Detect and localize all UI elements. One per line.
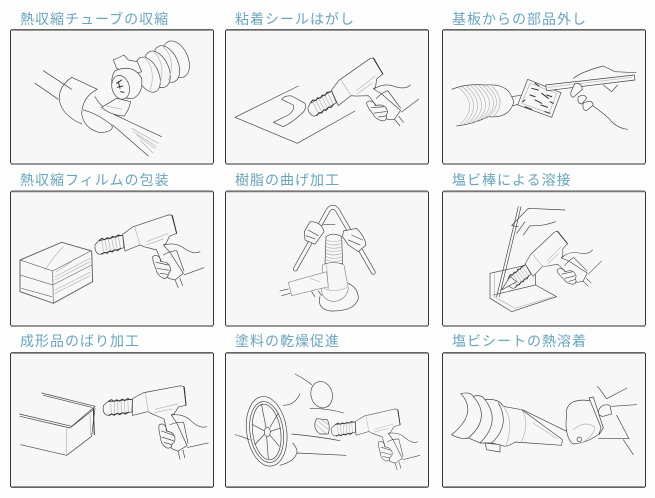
illustration: tube and connector [35,37,195,156]
panel: resin bending [226,172,428,326]
panel frame [226,191,428,326]
illustration: car with heat gun [235,374,424,472]
heading: component removal: 基板からの部品外し [452,11,587,27]
panel frame [226,30,428,164]
panel frame [10,191,214,326]
illustration: peeling sticker with heat gun [235,49,424,149]
panel: PVC sheet welding [442,333,646,488]
heading: paint drying: 塗料の乾燥促進 [235,333,340,349]
illustration: nozzle and pressure roller [452,386,637,455]
panel: deburring molded parts [10,333,216,488]
heading: PVC rod welding: 塩ビ棒による溶接 [452,172,572,188]
illustration: wrapped boxes with heat gun [20,215,204,303]
heading: shrink film packaging: 熱収縮フィルムの包装 [20,172,169,188]
illustration: welding with PVC rod [490,207,609,316]
heading: deburring: 成形品のばり加工 [20,333,140,349]
panel: paint drying [226,333,428,488]
panel frame [442,191,646,326]
panel frame [10,30,214,164]
panel frame [442,30,646,164]
heading: PVC sheet welding: 塩ビシートの熱溶着 [452,333,587,349]
illustration: molded box with heat gun [19,376,216,463]
heading: sticker peeling: 粘着シールはがし [235,11,355,27]
illustration: bending a resin rod over a heat gun [280,207,373,311]
panel frame [10,352,214,488]
panel: sticker peeling [226,11,428,164]
panel: heat-shrink tube [10,11,214,164]
panel: board component removal [442,11,646,164]
heading: resin bending: 樹脂の曲げ加工 [235,172,340,188]
panel frame [442,352,646,488]
heading: heat-shrink tube: 熱収縮チューブの収縮 [20,11,169,27]
illustration: circuit board with tweezers [452,66,636,129]
panel: PVC rod welding [442,172,646,326]
panel frame [226,352,428,488]
panel: shrink film packaging [10,172,214,326]
